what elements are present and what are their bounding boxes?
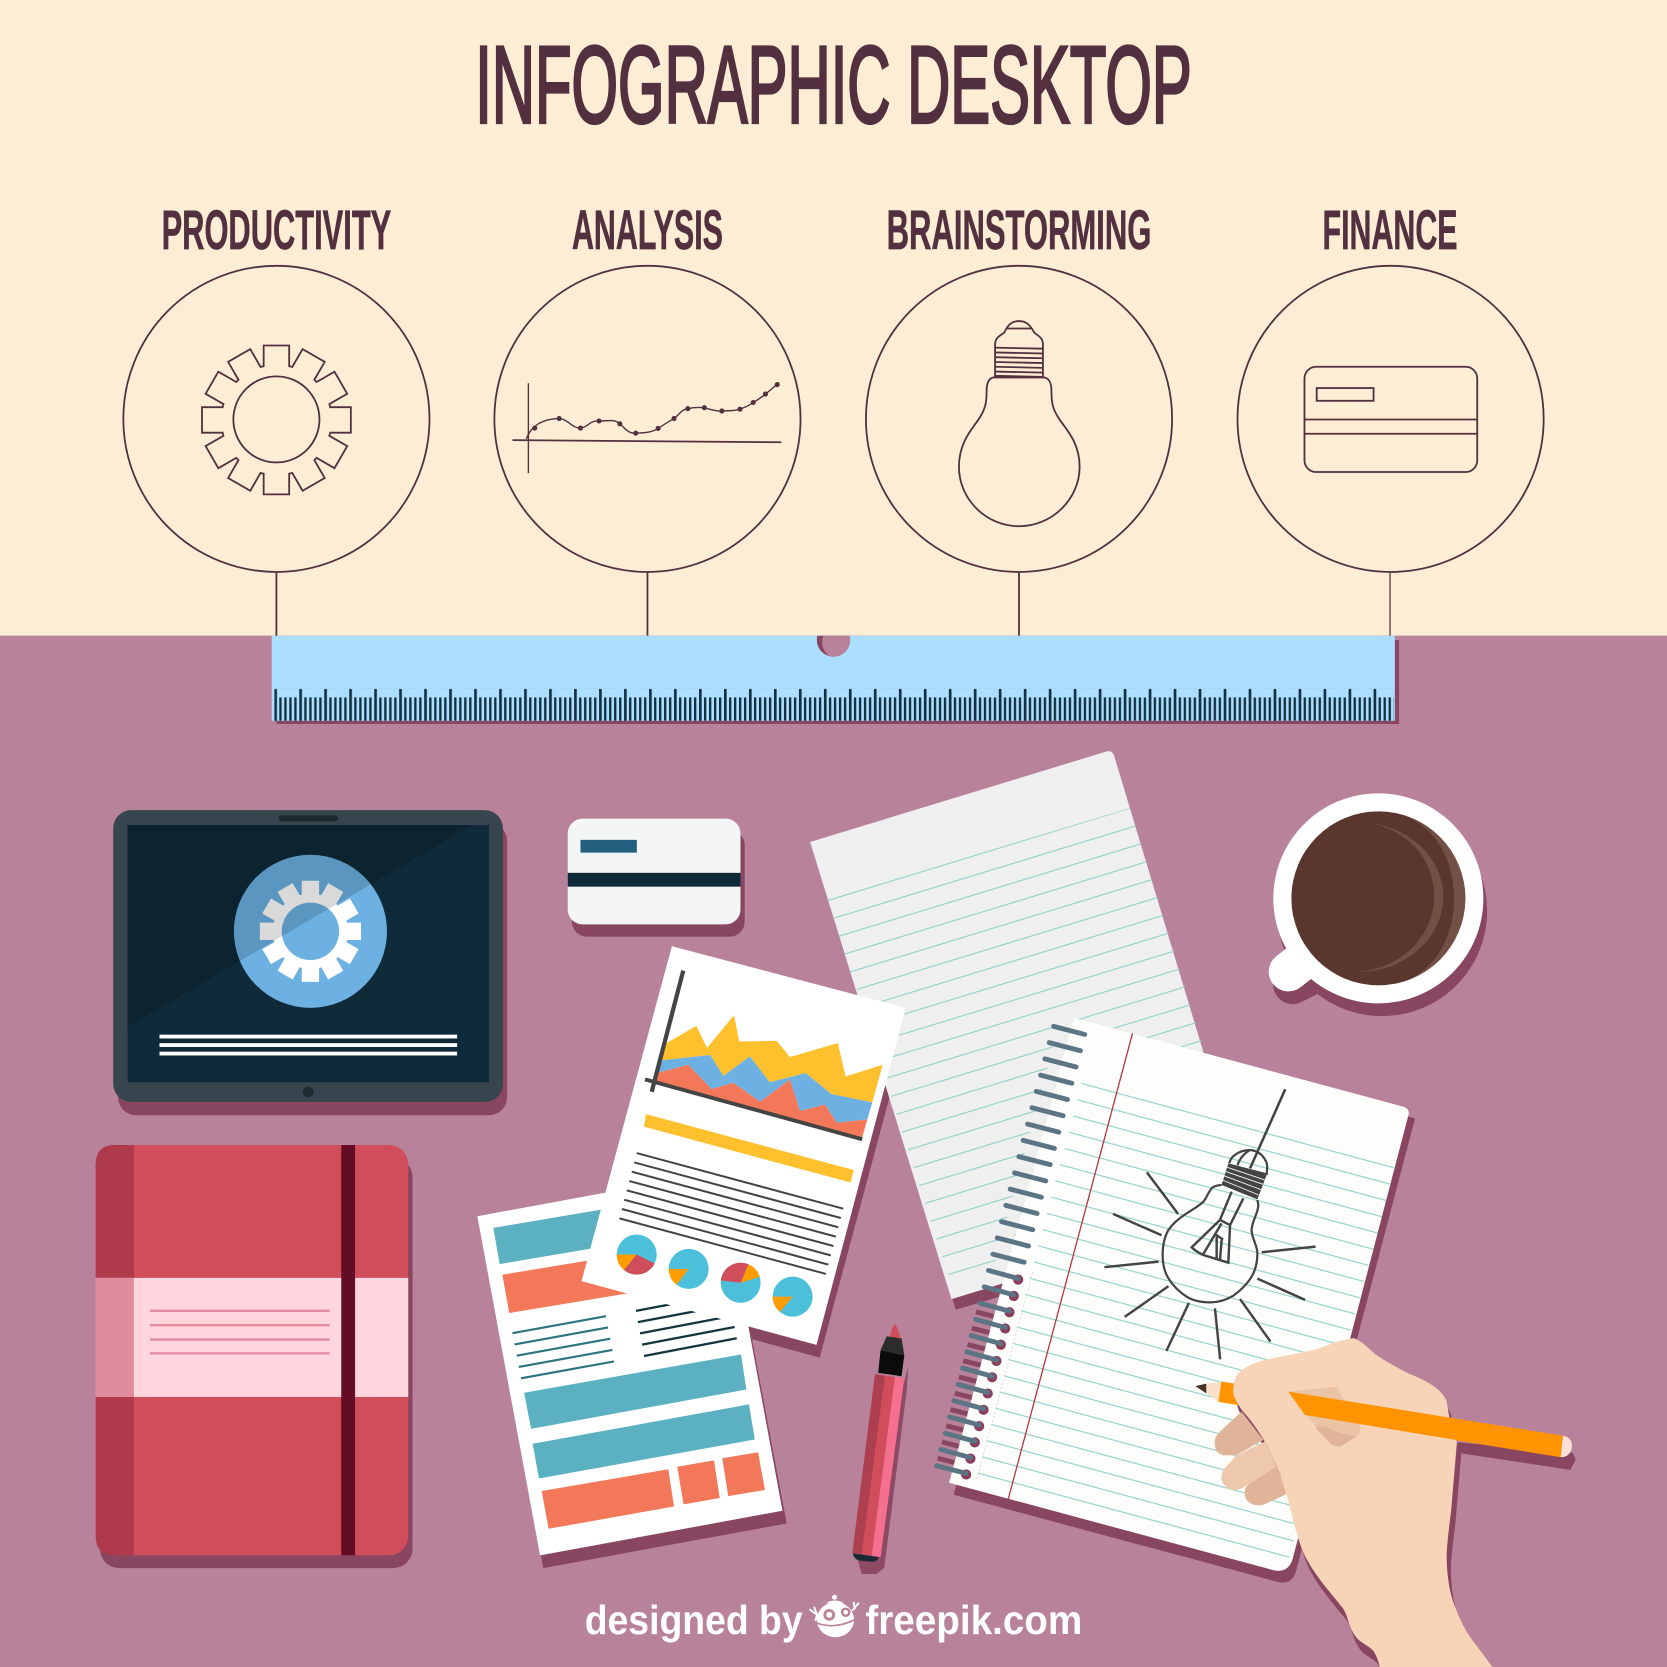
credit: freepik.com: freepik.com [865, 1597, 1082, 1643]
icon: line chart [512, 382, 781, 473]
teal band two [533, 1404, 755, 1479]
tablet screen [128, 825, 489, 1082]
text lines [619, 1153, 843, 1274]
teal header block [493, 1203, 644, 1264]
icon: light bulb outline [959, 321, 1080, 526]
pencil shadow [1458, 1442, 1576, 1470]
notepad red margin line [1008, 1033, 1133, 1500]
palm [1233, 1338, 1492, 1667]
orange blocks [542, 1452, 765, 1529]
notebook spine [96, 1145, 134, 1555]
pencil eraser [1561, 1436, 1572, 1457]
pie chart two [669, 1249, 709, 1289]
binding holes [961, 1274, 1023, 1480]
pie chart four [773, 1277, 813, 1317]
spiral ring shadows [938, 1312, 1001, 1465]
ruler ticks [274, 689, 1394, 721]
card number box [580, 840, 637, 853]
hand shadow [1237, 1351, 1497, 1667]
notepad ruled lines [976, 1081, 1396, 1561]
screen gear disc [234, 855, 387, 1008]
bulb socket [1222, 1150, 1267, 1199]
lined paper sheet [810, 751, 1255, 1310]
panel: finance circle with credit card icon [1237, 266, 1544, 636]
pencil barrel over hand [1288, 1392, 1563, 1457]
notebook elastic [341, 1145, 355, 1555]
yellow bar [644, 1114, 854, 1183]
mauve desk background [0, 636, 1667, 1667]
screen glare [128, 825, 472, 1027]
red notebook [96, 1145, 412, 1568]
pencil tip and barrel [1195, 1381, 1563, 1457]
area chart [645, 971, 883, 1139]
bulb rays [1104, 1172, 1316, 1359]
cup body and handle [1273, 793, 1483, 1003]
notebook label band [96, 1278, 408, 1397]
spiral rings [937, 1026, 1085, 1473]
bulb filament [1192, 1192, 1243, 1263]
icon: credit card outline [1304, 367, 1477, 472]
pie chart three [721, 1263, 761, 1303]
coffee cup [1273, 793, 1487, 1016]
panel: brainstorming circle with light bulb icon [866, 266, 1172, 636]
panel: productivity circle with gear icon [123, 266, 430, 636]
lower report page [477, 1172, 787, 1568]
chart report page [582, 946, 906, 1345]
right text lines [636, 1293, 737, 1356]
pie chart one [617, 1235, 657, 1275]
heading: analysis: ANALYSIS [572, 199, 723, 261]
chart paper shadow [586, 959, 910, 1358]
tablet [113, 810, 507, 1115]
panel: analysis circle with line chart icon [494, 266, 801, 636]
orange header block [502, 1252, 644, 1313]
tablet home button [303, 1087, 314, 1097]
tablet speaker [279, 815, 338, 821]
ruler notch [816, 636, 850, 657]
spiral notepad [937, 1018, 1415, 1583]
credit: designed by: designed by [585, 1597, 803, 1643]
notepad perforation [976, 1272, 1033, 1481]
left text lines [512, 1316, 614, 1378]
thumb crease [1288, 1387, 1360, 1447]
heading: brainstorming: BRAINSTORMING [887, 199, 1151, 261]
coffee surface [1291, 811, 1465, 985]
fingers [1215, 1412, 1288, 1505]
heading: finance: FINANCE [1323, 199, 1458, 261]
marker pen [852, 1324, 908, 1574]
heading: productivity: PRODUCTIVITY [162, 199, 391, 261]
ruler [272, 636, 1400, 724]
teal band one [524, 1354, 746, 1429]
hand holding pencil [1195, 1338, 1576, 1667]
credit card [568, 819, 745, 937]
screen text lines [159, 1035, 457, 1055]
card magnetic stripe [568, 873, 740, 887]
icon: freepik mascot [810, 1595, 858, 1637]
sketched light bulb with rays [1104, 1089, 1316, 1359]
cream top background [0, 0, 1667, 636]
icon: gear outline [202, 346, 351, 494]
